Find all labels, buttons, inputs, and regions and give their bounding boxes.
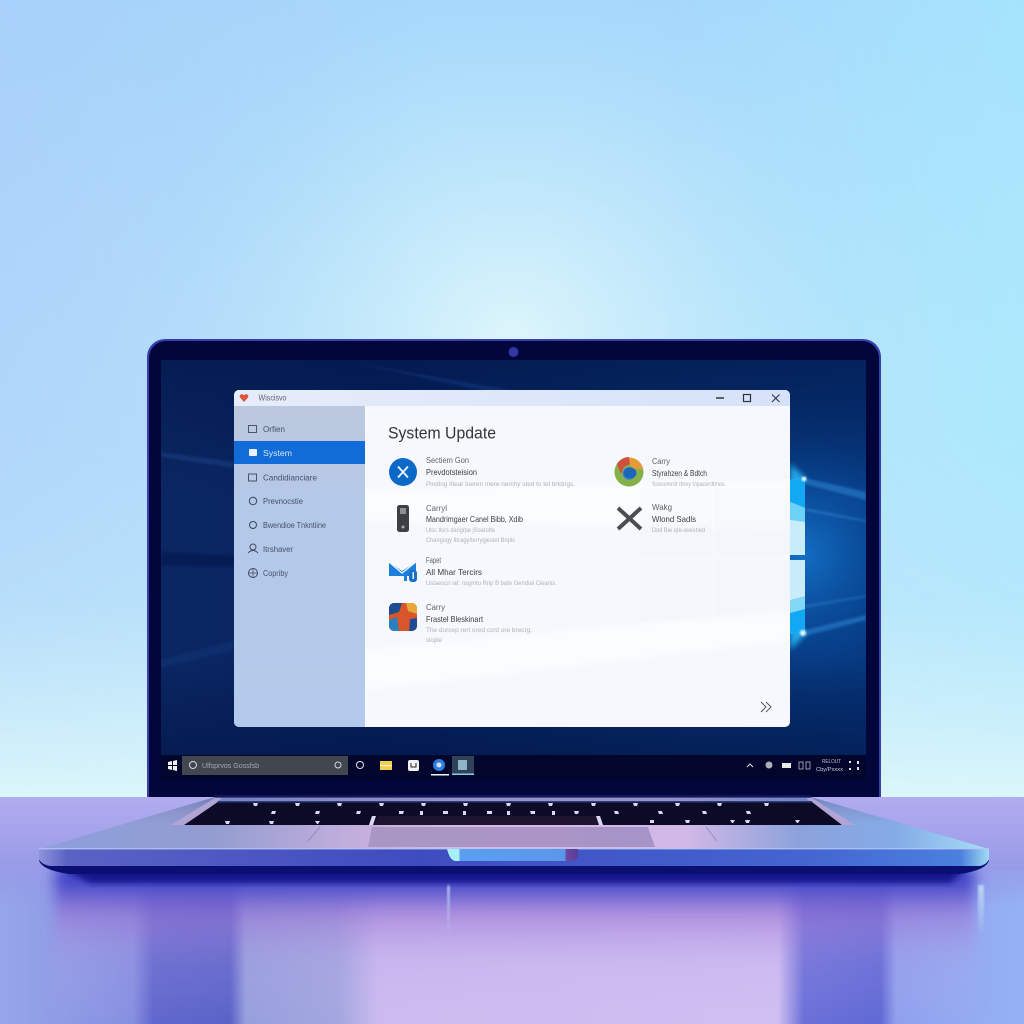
title bar	[234, 390, 790, 406]
update row: system: Pinding Itiear loeren mere nerchy sted to tel brtdngs.	[426, 481, 575, 488]
webcam	[508, 347, 518, 357]
update row: app tile: Frastel Bleskinart	[426, 614, 484, 624]
window controls	[716, 394, 780, 402]
nav item: Itrshaver	[248, 544, 293, 554]
update row: mail	[389, 556, 557, 587]
update row: app tile: stopte	[426, 637, 442, 644]
update row: mail: All Mhar Tercirs	[426, 567, 482, 577]
selected item: System	[234, 441, 365, 464]
nav item: Orfien	[248, 425, 284, 433]
update row: phone: Ulsc tlsrs dangrpe jSoarotte	[426, 527, 495, 534]
taskbar icons	[356, 756, 474, 776]
update row: browser: Carry	[652, 457, 670, 466]
update row: mail: Ustaescn iaf. nsgmtu Rnp B bate Gendial Cleanis.	[426, 580, 557, 587]
laptop lid	[147, 339, 881, 797]
update row: phone: Mandrimgaer Canel Bibb, Xdib	[426, 514, 523, 524]
nav item: Copriby: Copriby	[263, 569, 288, 578]
nav item: Orfien: Orfien	[263, 425, 285, 434]
laptop base	[39, 797, 989, 883]
latch tab	[447, 849, 578, 861]
nav item: Prevnocstie: Prevnocstie	[263, 497, 304, 506]
system tray	[747, 759, 859, 773]
update row: system	[389, 456, 575, 488]
search box: Ulfsprvos Gossfsb	[202, 761, 259, 770]
update row: system: Prevdotsteision	[426, 467, 477, 477]
nav item: Candidianciare: Candidianciare	[263, 474, 318, 482]
update row: system: Sectiem Gon	[426, 456, 469, 465]
palm rest grooves	[308, 827, 717, 841]
update row: phone: Carryl	[426, 504, 447, 513]
base underside	[39, 860, 989, 874]
nav item: Itrshaver: Itrshaver	[263, 545, 293, 554]
update row: cross	[618, 503, 705, 534]
app icon	[240, 394, 248, 402]
application window	[234, 390, 790, 727]
system tray: RELOUT	[822, 759, 842, 765]
desktop wallpaper	[161, 360, 866, 756]
update row: cross: Wakg	[652, 503, 672, 512]
update row: app tile: Carry	[426, 603, 445, 612]
nav item: Bwendioe Tnkntiine: Bwendioe Tnkntiine	[263, 521, 326, 530]
selected item: System: System	[263, 449, 292, 458]
sidebar	[234, 406, 365, 727]
update row: browser: Styrahzen & Bdtch	[652, 468, 707, 478]
key highlights	[225, 803, 800, 825]
update row: mail: Fapet	[426, 556, 442, 565]
keyboard deck	[39, 797, 989, 850]
nav item: Copriby	[248, 568, 288, 578]
window name: Wiscisvo	[258, 394, 287, 402]
update row: app tile	[389, 603, 532, 644]
start button	[168, 760, 177, 771]
keyboard	[184, 801, 842, 825]
reflective table surface	[0, 797, 1024, 1024]
search box	[182, 756, 348, 775]
heading: System Update: System Update	[388, 424, 496, 442]
update row: phone	[397, 504, 523, 544]
front edge	[39, 849, 989, 866]
window glass reflections	[365, 480, 790, 690]
windows logo glow panes	[790, 476, 806, 636]
update row: app tile: The durcep rert ored ccrd ore brecrg,	[426, 627, 532, 634]
update row: browser: Scesomrdr Ibrey topacerdtmes.	[652, 481, 726, 488]
spacebar	[374, 816, 603, 825]
trackpad	[368, 827, 655, 847]
screen hinge shadow	[215, 795, 811, 798]
taskbar	[161, 755, 866, 780]
background sky gradient	[0, 0, 1024, 800]
update row: cross: Dod Bie qre-aseshed	[652, 527, 705, 534]
update row: browser	[614, 457, 726, 488]
keyboard trim	[171, 798, 855, 825]
update row: phone: Changogy Ibragy/terrygjestet Bnpls	[426, 537, 516, 544]
system tray: Cby/Pxxxx	[816, 767, 843, 773]
next arrow	[761, 702, 771, 712]
nav item: Bwendioe Tnkntiine	[249, 521, 326, 529]
contact shadow	[60, 868, 968, 883]
update row: cross: Wlond Sadls	[652, 514, 696, 524]
